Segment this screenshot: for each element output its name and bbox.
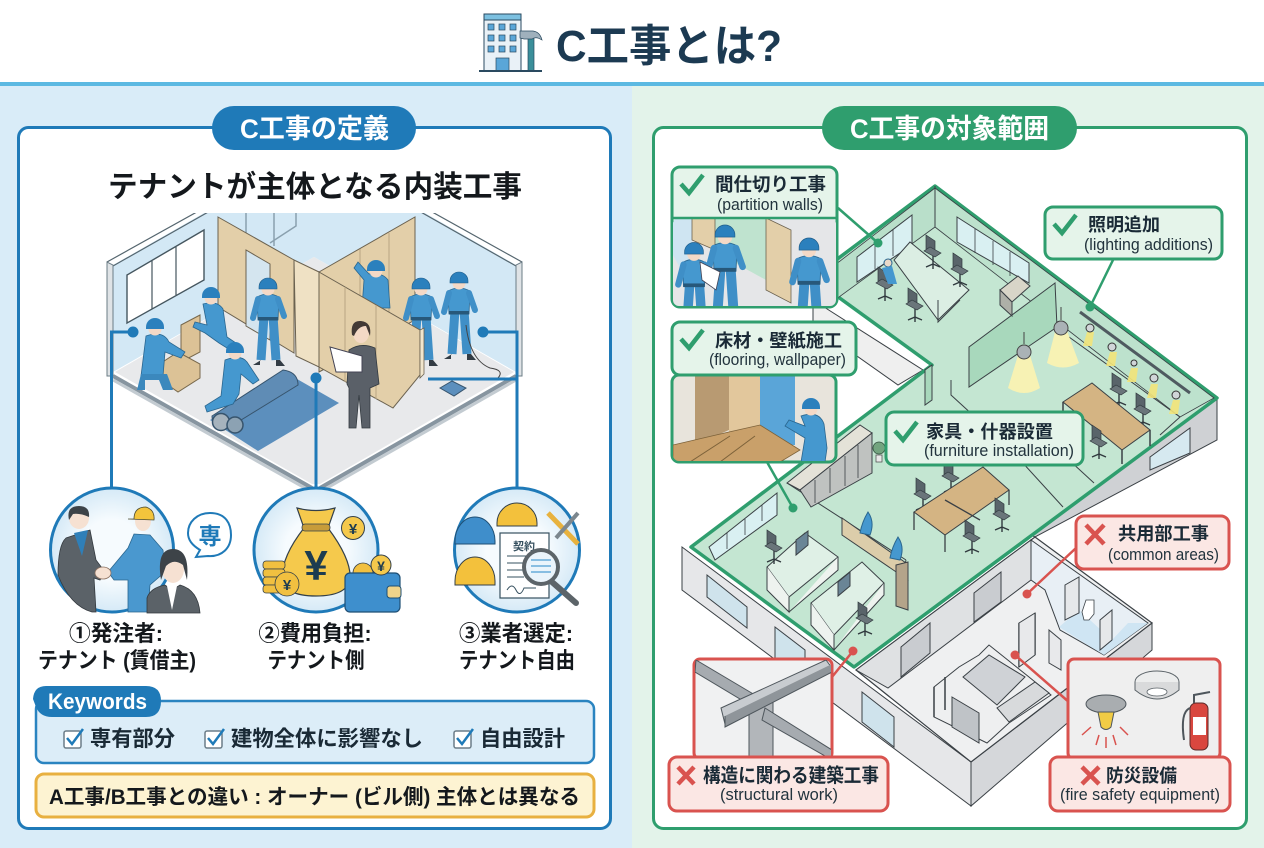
callout: structural work: 構造に関わる建築工事 xyxy=(703,764,879,787)
connector: fire safety xyxy=(1010,650,1070,703)
furniture: lower office xyxy=(765,512,908,650)
callout: flooring and wallpaper xyxy=(672,375,836,462)
callout image: flooring xyxy=(673,375,827,462)
heading pill: C工事の定義 xyxy=(212,106,416,150)
callout: fire safety equipment: (fire safety equipment) xyxy=(1060,786,1220,804)
heading pill: C工事の対象範囲: C工事の対象範囲 xyxy=(850,114,1049,144)
connector lines xyxy=(112,328,517,488)
callout: structural work xyxy=(669,659,888,811)
label: 業者選定: ③業者選定: xyxy=(459,621,573,646)
title: C工事とは? xyxy=(556,22,782,71)
note: difference from A/B work: A工事/B工事との違い : オーナー (ビル側) 主体とは異なる xyxy=(49,785,580,809)
common wing floor xyxy=(856,537,1152,762)
outer walls xyxy=(682,547,971,806)
boxes xyxy=(158,315,200,392)
note: difference from A/B work xyxy=(36,774,594,817)
callout: furniture installation: (furniture installation) xyxy=(924,442,1074,460)
label: 発注者 xyxy=(38,621,196,673)
callout image: steel beams xyxy=(694,659,832,760)
floor plan: building xyxy=(682,186,1217,806)
label: flooring and wallpaper xyxy=(672,322,856,375)
panel: C工事の定義 xyxy=(18,106,610,828)
label: 業者選定 xyxy=(459,621,575,673)
callout: lighting additions: (lighting additions) xyxy=(1084,236,1213,254)
elevators and shafts xyxy=(934,645,1051,743)
furniture: upper office xyxy=(876,235,1030,322)
label: 費用負担: ②費用負担: xyxy=(258,621,372,646)
workers xyxy=(137,260,500,412)
icon: ordering party circle xyxy=(50,488,231,613)
callout: partition walls xyxy=(670,166,838,308)
callout: lighting additions xyxy=(1045,207,1222,259)
label: 業者選定: テナント自由 xyxy=(459,648,575,673)
carpet roll xyxy=(210,370,339,451)
icon: money bag circle xyxy=(254,488,401,612)
keywords tab xyxy=(33,686,161,717)
label: 発注者: テナント (賃借主) xyxy=(38,648,196,673)
callout: fire safety equipment xyxy=(1050,659,1230,811)
icon: money bag circle: ¥ xyxy=(349,521,358,538)
icon: building and hammer xyxy=(479,14,542,72)
callout: common areas: (common areas) xyxy=(1108,546,1219,564)
icon: money bag circle: ¥ xyxy=(283,577,292,594)
icon: money bag circle: ¥ xyxy=(377,558,385,574)
concave grey floor xyxy=(813,300,923,385)
connector: structural work xyxy=(832,646,858,677)
heading pill: C工事の対象範囲 xyxy=(822,106,1077,150)
subheading: テナントが主体となる内装工事 xyxy=(108,170,522,204)
connector: flooring xyxy=(767,462,798,512)
furniture: pendant lights and track xyxy=(1008,307,1190,414)
keyword items xyxy=(64,727,565,751)
callout: lighting additions: 照明追加 xyxy=(1088,215,1160,235)
label: flooring and wallpaper: (flooring, wallpaper) xyxy=(709,351,846,369)
speech bubble: 専 xyxy=(198,523,222,549)
heading pill: C工事の定義: C工事の定義 xyxy=(240,114,389,144)
panel: C工事の対象範囲 xyxy=(654,106,1246,828)
connector: common areas xyxy=(1022,548,1076,598)
keywords box xyxy=(33,686,594,763)
connector: lighting xyxy=(1086,260,1113,312)
illustration: interior construction room xyxy=(107,208,522,492)
label: 発注者: ①発注者: xyxy=(69,621,163,646)
woman with blueprint xyxy=(330,321,379,428)
label: 費用負担: テナント側 xyxy=(268,648,364,673)
callout: furniture installation: 家具・什器設置 xyxy=(926,422,1053,442)
restroom xyxy=(1031,540,1148,655)
speech bubble xyxy=(188,513,231,557)
partition front panel xyxy=(319,272,424,408)
callout: partition walls: (partition walls) xyxy=(717,196,823,214)
callout: common areas xyxy=(1076,516,1229,569)
keyword items: 自由設計 xyxy=(480,727,565,751)
keyword items: 専有部分 xyxy=(90,727,175,751)
callout: structural work: (structural work) xyxy=(720,786,838,804)
label: flooring and wallpaper: 床材・壁紙施工 xyxy=(715,331,842,351)
icon: contractor selection circle xyxy=(454,488,580,612)
callout: common areas: 共用部工事 xyxy=(1118,524,1209,544)
furniture: meeting tables xyxy=(914,373,1151,554)
connector: partition walls xyxy=(838,208,882,248)
callout: partition walls: 間仕切り工事 xyxy=(715,174,826,195)
icon: money bag circle: ¥ xyxy=(304,542,328,589)
callout image: fire safety devices xyxy=(1068,659,1220,759)
green tenant zone xyxy=(691,186,1217,667)
keyword items: 建物全体に影響なし xyxy=(231,727,423,751)
keywords tab: Keywords xyxy=(48,689,147,714)
icon: contractor selection circle: 契約 xyxy=(513,539,535,553)
outer wall windows xyxy=(707,575,894,747)
label: 費用負担 xyxy=(258,621,372,673)
furniture: cabinets and plant xyxy=(787,425,885,507)
callout: furniture installation xyxy=(886,412,1083,465)
callout image: partition walls xyxy=(673,219,836,306)
callout: fire safety equipment: 防災設備 xyxy=(1106,766,1177,786)
